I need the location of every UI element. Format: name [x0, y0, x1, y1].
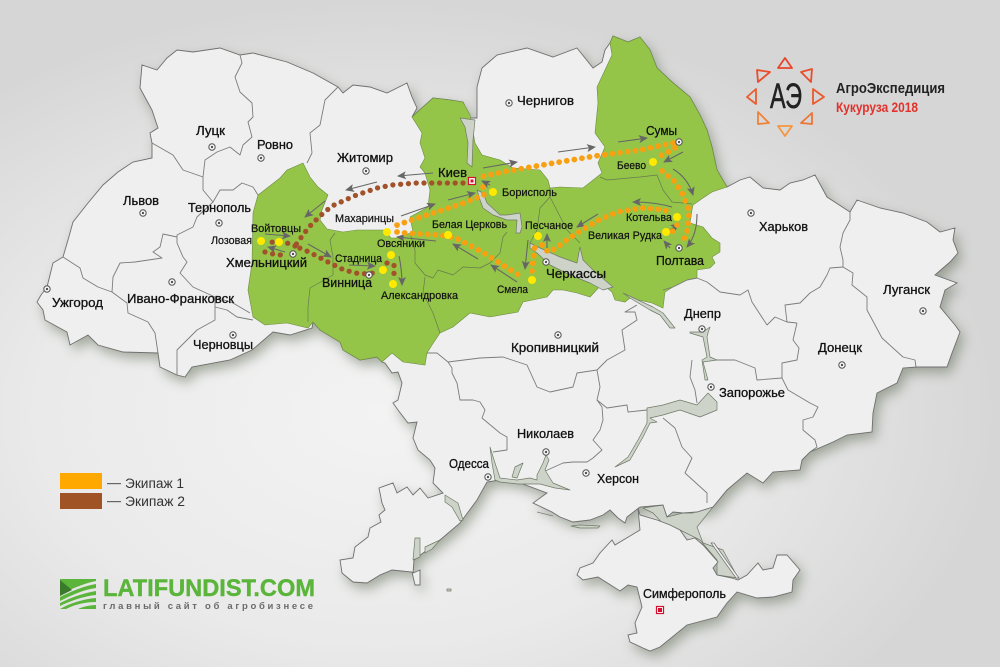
stop labels: Беево: [617, 160, 646, 172]
brand name: LATIFUNDIST.COM: [103, 575, 315, 602]
city labels: Харьков: [759, 219, 808, 234]
capital marker: Kyiv: [468, 178, 476, 184]
route stops: [257, 158, 681, 288]
city labels: [52, 93, 930, 601]
route arrows: [265, 138, 697, 285]
stop labels: Борисполь: [502, 187, 557, 199]
city labels: Житомир: [337, 150, 393, 165]
city labels: Ивано-Франковск: [127, 291, 234, 306]
city markers: [44, 100, 926, 480]
stop labels: Александровка: [381, 290, 459, 302]
city labels: Кропивницкий: [511, 340, 599, 355]
stop labels: Стадница: [335, 253, 383, 265]
city labels: Ровно: [257, 137, 293, 152]
legend: [60, 473, 185, 509]
route: crew 1: [392, 143, 689, 278]
city labels: Луганск: [883, 282, 930, 297]
Arabat spit: [711, 543, 739, 578]
green oblasts on route: [248, 36, 727, 365]
sun-ray triangles: [747, 58, 824, 136]
city labels: Николаев: [517, 426, 574, 441]
oblast borders: [63, 55, 916, 503]
city labels: Одесса: [449, 456, 490, 471]
stop labels: Лозовая: [211, 235, 252, 247]
logo title: АгроЭкспедиция: [836, 80, 945, 97]
city labels: Сумы: [646, 123, 677, 138]
city labels: Хмельницкий: [226, 255, 307, 270]
city labels: Луцк: [196, 123, 225, 138]
rivers and reservoirs: [413, 118, 717, 591]
city labels: Херсон: [597, 471, 639, 486]
city labels: Чернигов: [517, 93, 574, 108]
legend item: crew 2: Экипаж 2: [125, 494, 185, 509]
borders inside green oblasts: [308, 175, 692, 333]
stop labels: Махаринцы: [335, 213, 394, 225]
legend item: crew 1: Экипаж 1: [125, 476, 184, 491]
stop labels: Войтовцы: [251, 223, 301, 235]
city labels: Черкассы: [546, 266, 606, 281]
stop labels: Смела: [497, 284, 529, 296]
city labels: Винница: [322, 275, 373, 290]
stop labels: Овсяники: [377, 238, 425, 250]
city labels: Ужгород: [52, 295, 103, 310]
Crimea: [577, 508, 800, 651]
city labels: Черновцы: [193, 337, 253, 352]
stop labels: [211, 160, 673, 302]
city labels: Полтава: [656, 253, 705, 268]
logo: AgroExpedition: [747, 58, 945, 136]
stop labels: Белая Церковь: [432, 219, 507, 231]
capital marker: Simferopol: [656, 606, 664, 614]
Syvash lagoon: [643, 473, 738, 578]
city marker centres: [46, 102, 924, 478]
city labels: Тернополь: [188, 200, 251, 215]
route: crew 2: [265, 183, 463, 274]
stop labels: Великая Рудка: [588, 230, 663, 242]
city labels: Донецк: [818, 340, 862, 355]
city labels: Днепр: [684, 306, 721, 321]
stop labels: Котельва: [626, 212, 673, 224]
stop labels: Песчаное: [525, 220, 573, 232]
field icon: [60, 579, 96, 609]
logo subtitle: Кукуруза 2018: [836, 99, 918, 115]
city labels: Киев: [438, 165, 467, 180]
city labels: Запорожье: [719, 385, 785, 400]
city labels: Симферополь: [643, 586, 726, 601]
city labels: Львов: [123, 193, 159, 208]
tagline: главный сайт об агробизнесе: [103, 601, 313, 612]
oblast base map: [37, 36, 960, 585]
logo monogram: АЭ: [770, 77, 802, 116]
logo: Latifundist: [60, 575, 315, 612]
